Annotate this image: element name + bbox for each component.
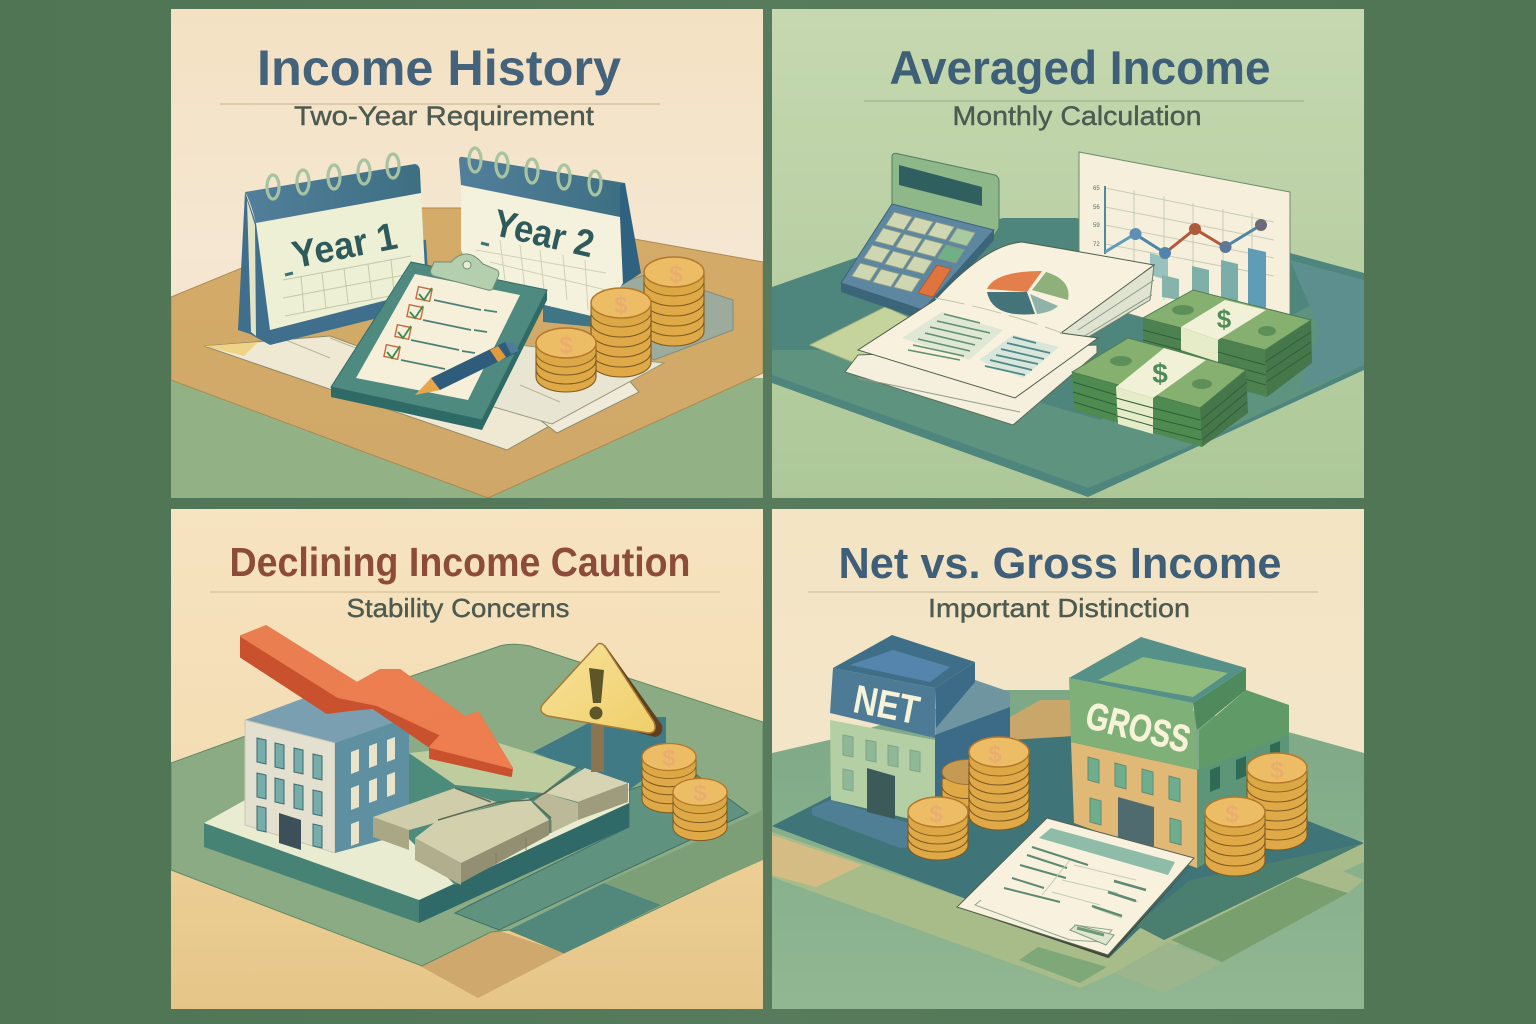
clipboard clip bbox=[430, 254, 499, 290]
tan ground bbox=[171, 860, 763, 1009]
chart axis labels bbox=[1093, 186, 1100, 246]
coin stacks: $ bbox=[614, 292, 628, 319]
building: gross bbox=[1069, 637, 1289, 868]
coin stacks: $ bbox=[669, 261, 683, 288]
gross windows bbox=[1088, 757, 1181, 845]
clipboard with checklist bbox=[331, 254, 547, 430]
dark teal plate bbox=[772, 735, 1364, 958]
coin stacks: net bbox=[908, 737, 1029, 860]
panel background bbox=[772, 509, 1364, 1009]
label: year 2: Year 2 bbox=[489, 202, 598, 266]
coin stacks: gross: $ bbox=[1225, 801, 1239, 828]
panel background bbox=[171, 509, 763, 762]
coin stacks bbox=[642, 744, 727, 841]
bars bbox=[1150, 248, 1266, 310]
label: net: NET bbox=[850, 677, 923, 733]
coin stacks: $ bbox=[693, 780, 707, 806]
net door bbox=[867, 768, 895, 819]
label: year 1: Year 1 bbox=[289, 215, 401, 277]
heading: declining income caution: Declining Income Caution bbox=[230, 539, 690, 585]
coin stacks: net: $ bbox=[929, 801, 943, 828]
foundation slab bbox=[204, 743, 629, 923]
green ground bbox=[171, 378, 763, 498]
calculator bbox=[841, 153, 999, 320]
coin stacks: gross bbox=[1205, 753, 1307, 876]
pencil bbox=[415, 342, 519, 395]
building: net bbox=[812, 635, 1010, 848]
net windows bbox=[843, 735, 920, 791]
panel background bbox=[171, 9, 763, 378]
pay statement document bbox=[957, 818, 1194, 958]
trend line bbox=[1105, 225, 1261, 253]
green ground bbox=[772, 690, 1364, 1009]
chart axis labels: 56 bbox=[1093, 205, 1100, 211]
calendar: year 2 bbox=[459, 148, 641, 327]
report text blocks bbox=[902, 312, 1059, 378]
coin stacks bbox=[536, 257, 704, 392]
tan ground patch bbox=[1005, 700, 1130, 745]
sign platform bbox=[533, 717, 666, 790]
heading: net vs gross income: Net vs. Gross Income bbox=[838, 539, 1282, 588]
cash stack back bbox=[1143, 290, 1312, 397]
chart axis labels: 65 bbox=[1093, 186, 1100, 192]
panel: declining income caution bbox=[171, 509, 763, 1009]
coin stacks: net: $ bbox=[988, 741, 1002, 768]
exclamation mark bbox=[589, 668, 604, 703]
coin stacks: gross: $ bbox=[1270, 757, 1284, 784]
teal mats bbox=[455, 770, 763, 953]
report document with pie chart bbox=[845, 242, 1154, 425]
heading: averaged income: Averaged Income bbox=[890, 41, 1270, 94]
sign post bbox=[591, 725, 604, 772]
cash stack front bbox=[1072, 338, 1248, 447]
subheading: stability concerns: Stability Concerns bbox=[346, 593, 570, 623]
panel: net vs gross income bbox=[772, 509, 1364, 1009]
chart axis labels: 59 bbox=[1093, 223, 1100, 229]
calculator keys bbox=[852, 212, 975, 292]
cash stack front: $ bbox=[1152, 358, 1168, 389]
grey box under coins bbox=[620, 273, 733, 360]
line and bar chart sheet bbox=[1078, 151, 1290, 318]
cash stack back: $ bbox=[1217, 304, 1232, 334]
teal mat bbox=[772, 218, 1364, 497]
coin stacks: $ bbox=[559, 332, 573, 359]
office building bbox=[245, 698, 409, 853]
declining red arrow bbox=[241, 626, 512, 776]
heading: income history: Income History bbox=[257, 40, 621, 96]
pie chart bbox=[987, 271, 1069, 315]
label: gross: GROSS bbox=[1081, 695, 1194, 762]
orange key bbox=[918, 265, 951, 297]
ground shadow bbox=[420, 928, 565, 998]
green sheet bbox=[809, 306, 908, 362]
cracked foundation blocks bbox=[373, 767, 628, 885]
coin stacks: $ bbox=[662, 745, 676, 771]
warning sign bbox=[541, 644, 662, 772]
subheading: important distinction: Important Distinction bbox=[928, 593, 1190, 623]
ground strips bbox=[772, 832, 1364, 993]
subheading: monthly calculation: Monthly Calculation bbox=[952, 101, 1202, 131]
green mat bbox=[171, 644, 763, 966]
panel: averaged income bbox=[772, 9, 1364, 498]
panel background bbox=[772, 9, 1364, 498]
crack lines bbox=[438, 767, 578, 820]
papers under clipboard bbox=[204, 336, 664, 450]
panel: income history bbox=[171, 9, 763, 498]
subheading: two-year requirement: Two-Year Requirement bbox=[294, 101, 595, 131]
building windows bbox=[257, 738, 322, 848]
tan mat bbox=[171, 208, 763, 498]
chart axis labels: 72 bbox=[1093, 242, 1100, 248]
calendar: year 1 bbox=[238, 154, 430, 345]
